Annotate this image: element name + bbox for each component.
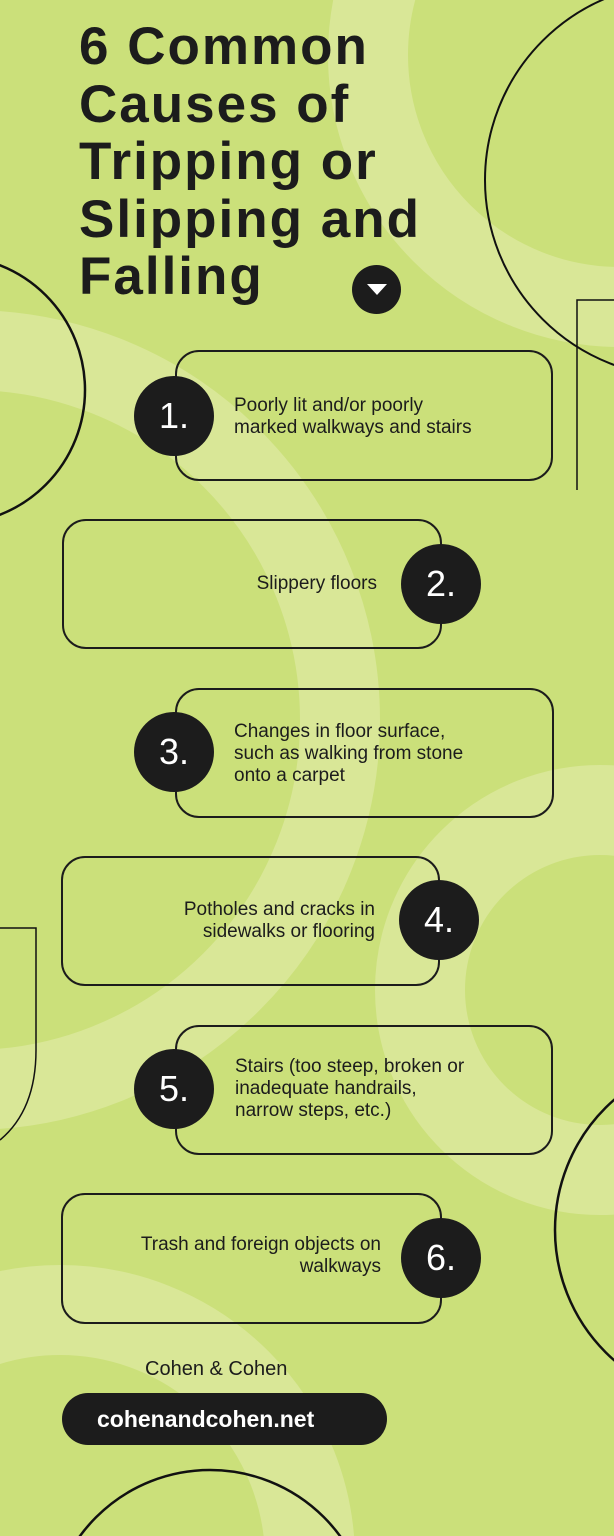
item 2: [62, 519, 481, 649]
icon: down arrow circle: [352, 265, 401, 314]
item 3: [134, 688, 554, 818]
item 3: onto a carpet: [234, 765, 345, 786]
item 2: 2.: [426, 563, 456, 604]
item 6: 6.: [426, 1237, 456, 1278]
item 4: [61, 856, 479, 986]
item 5: 5.: [159, 1068, 189, 1109]
item 3: Changes in floor surface,: [234, 721, 445, 742]
item 5: [134, 1025, 553, 1155]
item 4: 4.: [424, 899, 454, 940]
website pill: [62, 1393, 387, 1445]
item 1: marked walkways and stairs: [234, 417, 472, 438]
title: 6 Common: [79, 17, 369, 76]
item 6: walkways: [300, 1256, 381, 1277]
item 4: sidewalks or flooring: [203, 921, 375, 942]
title: [79, 17, 421, 306]
item 5: Stairs (too steep, broken or: [235, 1056, 464, 1077]
item 3: 3.: [159, 731, 189, 772]
item 3: such as walking from stone: [234, 743, 463, 764]
item 5: narrow steps, etc.): [235, 1100, 391, 1121]
item 4: Potholes and cracks in: [184, 899, 375, 920]
title: Slipping and: [79, 190, 421, 248]
item 6: Trash and foreign objects on: [141, 1234, 381, 1255]
item 1: Poorly lit and/or poorly: [234, 395, 423, 416]
item 1: [134, 350, 553, 481]
item 2: Slippery floors: [257, 573, 377, 594]
item 6: [61, 1193, 481, 1324]
item 1: 1.: [159, 395, 189, 436]
footer brand: Cohen & Cohen: [145, 1358, 287, 1380]
item 5: inadequate handrails,: [235, 1078, 417, 1099]
title: Causes of: [79, 74, 350, 134]
title: Tripping or: [79, 132, 378, 191]
title: Falling: [79, 247, 264, 306]
website pill: cohenandcohen.net: [97, 1406, 314, 1432]
